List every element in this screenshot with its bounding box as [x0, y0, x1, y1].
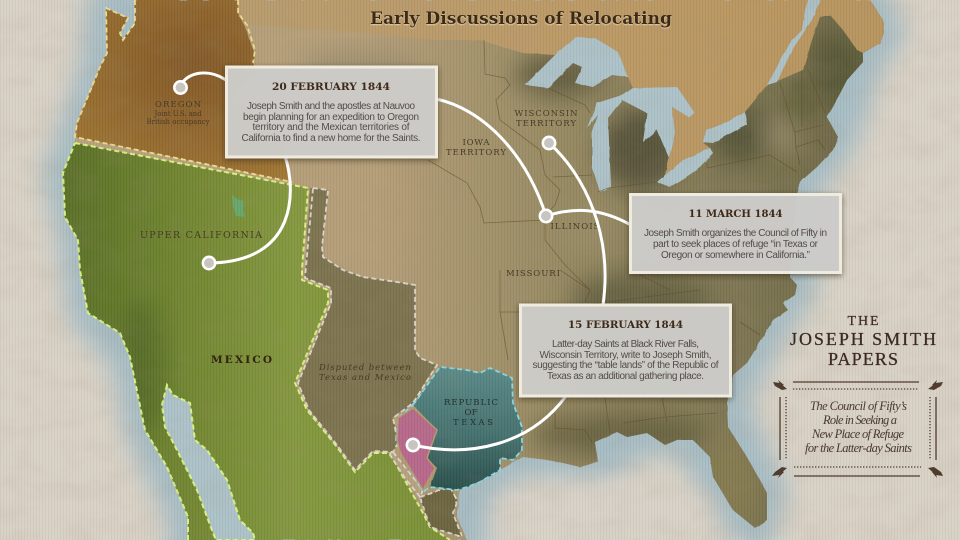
St. Lawrence river — [767, 0, 820, 85]
dot: Texas — [407, 439, 419, 451]
connector: third panel to Texas — [413, 396, 566, 450]
description: Oregon or somewhere in California.” — [661, 250, 810, 261]
connector lines — [180, 73, 631, 450]
dot: Upper California — [203, 257, 215, 269]
eastern shading — [300, 30, 870, 526]
lighter paper patch in the gulf — [493, 485, 717, 539]
description: Texas as an additional gathering place. — [547, 371, 704, 382]
label: Republic of Texas: TEXAS — [453, 418, 493, 428]
connector: first panel to Illinois — [436, 99, 546, 216]
label: Disputed — [318, 363, 411, 383]
label: Mexico: MEXICO — [211, 354, 272, 366]
description: California to find a new home for the Saints. — [242, 133, 420, 144]
title: Early Discussions of Relocating — [370, 9, 672, 29]
description — [532, 339, 719, 382]
label: Illinois: ILLINOIS — [550, 222, 600, 232]
location dots — [174, 81, 555, 451]
state and territory lines — [428, 40, 825, 442]
Lake Erie — [657, 148, 713, 187]
description: begin planning for an expedition to Oregon — [243, 112, 419, 123]
panel: 11 March 1844 — [630, 194, 840, 272]
canada — [238, 0, 884, 175]
date: 11 MARCH 1844 — [688, 208, 782, 220]
caption text: New Place of Refuge — [811, 427, 904, 441]
corner ornaments — [772, 380, 943, 478]
dot: Oregon — [174, 81, 187, 94]
label: Upper California: UPPER CALIFORNIA — [140, 230, 262, 241]
description — [242, 101, 420, 144]
Great Salt Lake mark — [232, 195, 245, 217]
caption text — [805, 399, 912, 455]
Lake Huron — [620, 87, 695, 158]
caption text: Role in Seeking a — [822, 413, 897, 427]
label: Oregon: British occupancy — [146, 118, 210, 126]
caption text: The Council of Fifty’s — [810, 399, 907, 413]
label: Oregon — [146, 100, 210, 126]
label: Iowa Territory — [446, 138, 506, 158]
Lake Michigan — [587, 95, 622, 192]
label: Wisconsin Territory — [514, 109, 578, 129]
dot: Wisconsin — [543, 137, 555, 149]
panel: 15 February 1844 — [520, 305, 730, 396]
region labels — [140, 100, 600, 428]
Contested pink region — [397, 408, 437, 490]
connector: first panel to Upper California — [209, 156, 290, 263]
logo: The Joseph Smith Papers: JOSEPH SMITH — [790, 329, 936, 349]
date: 15 FEBRUARY 1844 — [568, 319, 683, 331]
label: Republic of Texas: REPUBLIC — [444, 398, 498, 408]
Mexico and Upper California — [63, 143, 450, 540]
label: Iowa Territory: IOWA — [462, 138, 490, 148]
logo: The Joseph Smith Papers — [790, 314, 936, 369]
description: territory and the Mexican territories of — [252, 122, 410, 133]
logo: The Joseph Smith Papers: PAPERS — [828, 349, 898, 369]
label: Oregon: OREGON — [155, 100, 202, 110]
description: Joseph Smith organizes the Council of Fifty in — [644, 228, 827, 239]
label: Wisconsin Territory: TERRITORY — [516, 119, 576, 129]
caption frame — [772, 380, 943, 478]
description: part to seek places of refuge “in Texas or — [653, 239, 819, 250]
Lake Ontario — [702, 112, 747, 143]
Lake Superior — [525, 37, 628, 88]
date: 20 FEBRUARY 1844 — [272, 81, 390, 93]
description: Latter-day Saints at Black River Falls, — [552, 339, 699, 350]
logo: The Joseph Smith Papers: THE — [848, 314, 878, 329]
Disputed territory — [298, 188, 462, 537]
label: Disputed: Texas and Mexico — [319, 373, 411, 383]
caption text: for the Latter-day Saints — [805, 441, 912, 455]
panel: 20 February 1844 — [226, 67, 436, 157]
dot: Illinois — [540, 210, 552, 222]
description: Joseph Smith and the apostles at Nauvoo — [247, 101, 415, 112]
description: Wisconsin Territory, write to Joseph Smith, — [540, 350, 712, 361]
label: Disputed: Disputed between — [318, 363, 411, 373]
Republic of Texas — [396, 367, 522, 492]
label: Iowa Territory: TERRITORY — [446, 148, 506, 158]
connector: Wisconsin to third panel — [549, 143, 605, 305]
lakes and St. Lawrence — [525, 0, 820, 192]
description — [644, 228, 827, 261]
label: Republic of Texas: OF — [464, 408, 478, 418]
label: Missouri: MISSOURI — [506, 269, 560, 279]
label: Wisconsin Territory: WISCONSIN — [514, 109, 578, 119]
connector: Illinois to second panel — [546, 210, 631, 225]
label: Republic of Texas — [444, 398, 498, 428]
description: suggesting the “table lands” of the Republic of — [532, 360, 719, 371]
Gulf of California — [162, 385, 255, 540]
connector: Oregon to first panel — [180, 73, 226, 87]
label: Oregon: Joint U.S. and — [154, 110, 202, 118]
Oregon territory — [75, 0, 292, 182]
